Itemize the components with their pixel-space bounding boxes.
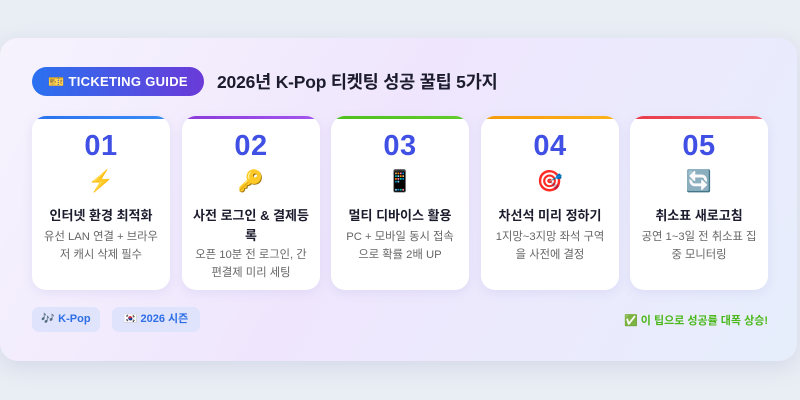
badge: ticketing guide: 🎫 TICKETING GUIDE	[48, 74, 188, 89]
card 5: 취소표 새로고침	[655, 208, 743, 223]
card 3: 📱	[387, 170, 413, 193]
card 3: 멀티 디바이스 활용	[349, 208, 451, 223]
card 5	[630, 116, 768, 290]
card 4: 04	[533, 130, 567, 162]
card 5: 05	[682, 130, 716, 162]
card 4: 1지망~3지망 좌석 구역을 사전에 결정	[496, 231, 604, 261]
card 2: 🔑	[238, 170, 264, 193]
tag: 2026 season	[112, 307, 200, 332]
card 2: 02	[234, 130, 268, 162]
card 2	[182, 116, 320, 290]
card 2: 오픈 10분 전 로그인, 간편결제 미리 세팅	[195, 249, 307, 279]
tag: 2026 season: 🇰🇷 2026 시즌	[124, 313, 188, 325]
card 4: 차선석 미리 정하기	[499, 208, 601, 223]
tag: kpop	[32, 307, 100, 332]
title: 2026년 K-Pop 티켓팅 성공 꿀팁 5가지	[217, 72, 498, 92]
success note: ✅ 이 팁으로 성공률 대폭 상승!	[624, 315, 768, 327]
card 1	[32, 116, 170, 290]
card 1: 유선 LAN 연결 + 브라우저 캐시 삭제 필수	[44, 231, 158, 261]
card 4	[481, 116, 619, 290]
card 5: 🔄	[686, 170, 712, 193]
badge: ticketing guide	[32, 67, 204, 96]
card 1: ⚡	[88, 170, 114, 193]
tag: kpop: 🎶 K-Pop	[41, 313, 91, 325]
card 3: 03	[383, 130, 417, 162]
card 4: 🎯	[537, 170, 563, 193]
card 1: 01	[84, 130, 118, 162]
card 1: 인터넷 환경 최적화	[50, 208, 152, 223]
card 3: PC + 모바일 동시 접속으로 확률 2배 UP	[346, 231, 454, 261]
card 2: 사전 로그인 & 결제등록	[193, 208, 309, 243]
card 3	[331, 116, 469, 290]
card 5: 공연 1~3일 전 취소표 집중 모니터링	[642, 231, 756, 261]
